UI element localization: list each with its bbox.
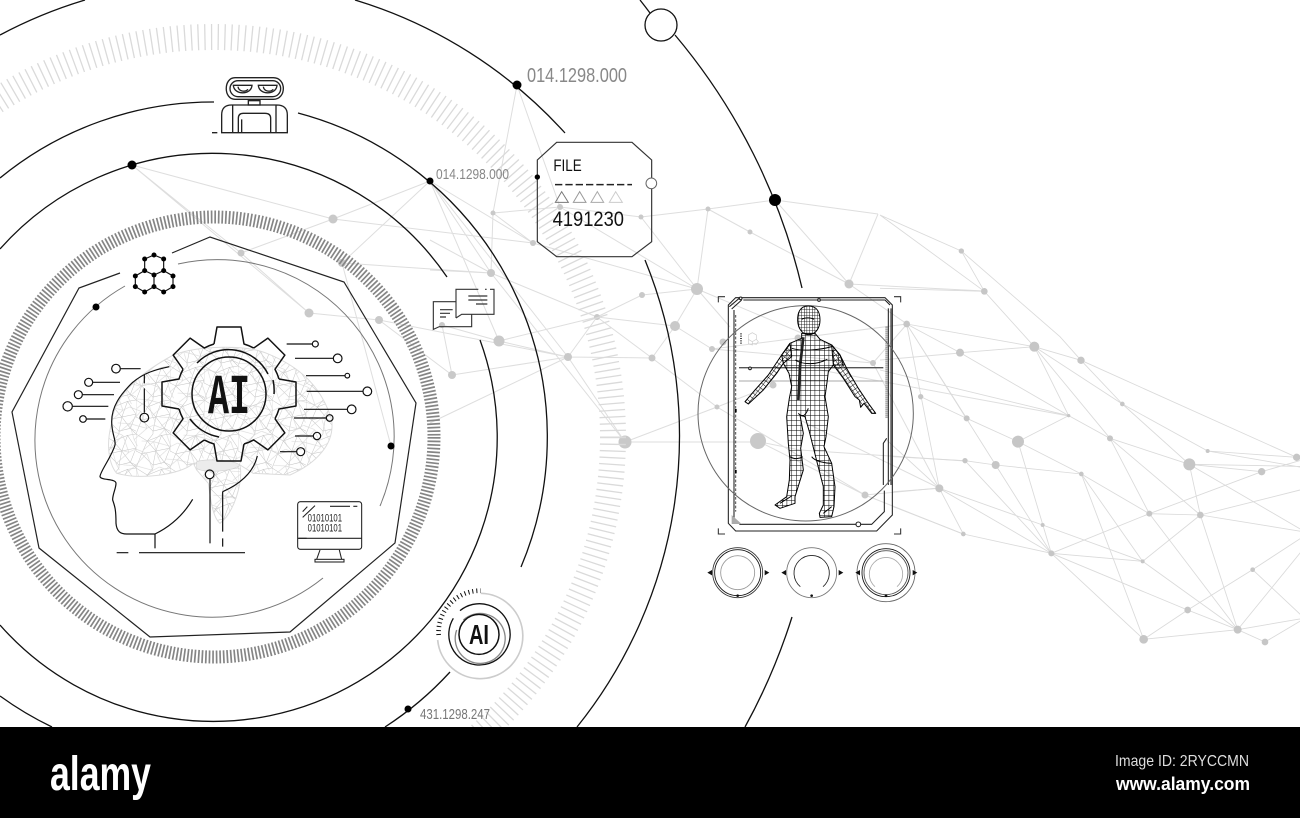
panel: file card xyxy=(535,142,657,257)
footer bar xyxy=(0,727,1300,818)
data label: lower: 431.1298.247 xyxy=(420,706,490,723)
gauge: left xyxy=(707,548,769,598)
orbit marker ring xyxy=(645,9,677,41)
badge: AI dial: AI xyxy=(469,619,489,650)
gauge: centre xyxy=(781,548,843,598)
icon: chat bubbles xyxy=(433,289,494,329)
wireframe human body xyxy=(745,306,876,517)
icon: computer monitor xyxy=(298,502,362,562)
network mesh: left and centre xyxy=(132,85,1069,534)
footer logo: alamy xyxy=(50,748,151,801)
network mesh: right xyxy=(880,215,1300,645)
inner dark tick ring xyxy=(0,217,434,657)
inner thin circle arcs xyxy=(35,260,394,617)
outer faint tick ring xyxy=(0,37,613,818)
icon: robot xyxy=(212,78,287,133)
orbit marker dots xyxy=(92,80,781,712)
panel: file card: 4191230 xyxy=(553,208,624,231)
panel: file card: FILE xyxy=(553,157,582,175)
panel: human scan frame xyxy=(698,297,913,534)
gear with AI: AI xyxy=(208,367,250,431)
footer image id: Image ID: 2RYCCMN xyxy=(1115,753,1249,770)
icon: hexagon molecule xyxy=(133,252,175,294)
gear with AI xyxy=(162,327,296,461)
footer url: www.alamy.com xyxy=(1115,774,1250,794)
head silhouette and connectors xyxy=(63,341,372,553)
badge: AI dial xyxy=(438,591,523,679)
icon: computer monitor: 01010101 xyxy=(308,513,342,525)
gauge: right xyxy=(855,544,917,602)
icon: computer monitor: 01010101 xyxy=(308,523,342,535)
octagon frame xyxy=(12,237,416,637)
data label: middle: 014.1298.000 xyxy=(436,166,509,183)
brain mesh xyxy=(109,347,332,523)
concentric orbit arcs xyxy=(0,0,802,727)
data label: upper: 014.1298.000 xyxy=(527,65,627,87)
